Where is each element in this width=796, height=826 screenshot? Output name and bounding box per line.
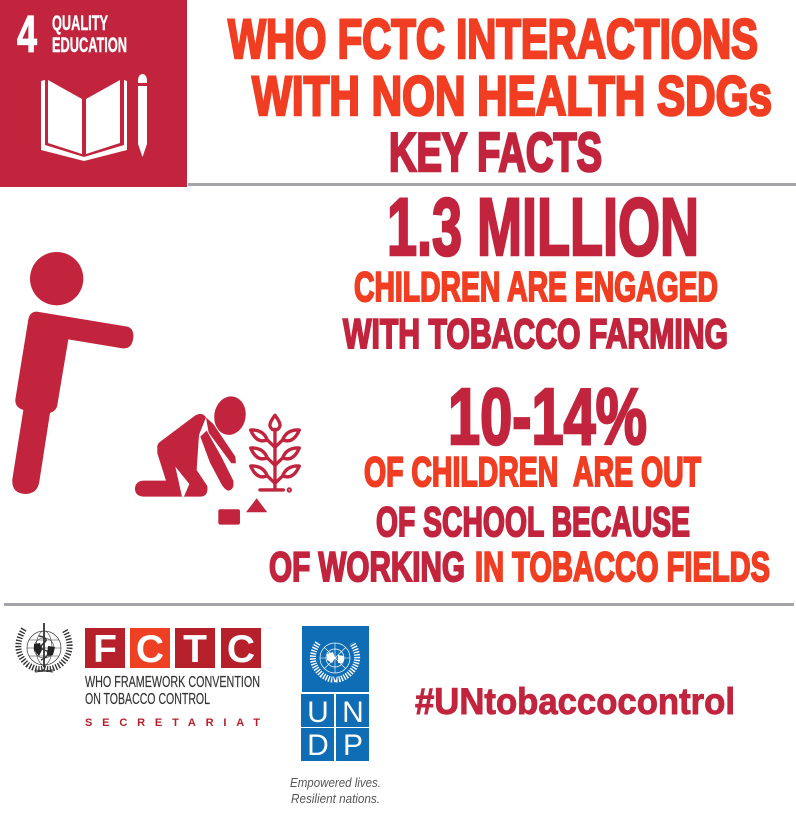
logo: WHO emblem: [18, 623, 70, 672]
badge number 4: 4: [17, 6, 37, 64]
UN emblem: [313, 643, 357, 680]
title: KEY FACTS: [389, 121, 602, 183]
footer divider: [4, 603, 794, 606]
statistic: 10-14% of children: OF WORKING: [269, 543, 465, 590]
secretariat label: SECRETARIAT: [85, 717, 260, 729]
UNDP letters: D: [307, 729, 329, 762]
logo: UNDP: [290, 626, 381, 806]
FCTC wordmark: ON TOBACCO CONTROL: [85, 691, 210, 708]
icon: pencil: [138, 74, 147, 157]
hashtag: #UNtobaccocontrol: [415, 681, 735, 722]
UNDP letters: N: [342, 696, 364, 729]
statistic: 10-14% of children: [269, 372, 770, 590]
icon: child crouching: [135, 394, 249, 497]
FCTC letters: C: [227, 628, 255, 671]
icon: open book: [41, 80, 127, 161]
UNDP tagline: Empowered lives.: [290, 775, 381, 790]
badge label: [52, 12, 127, 57]
panel: SDG 4 quality education badge: [0, 0, 187, 187]
badge label: EDUCATION: [52, 34, 127, 57]
icon: toy blocks: [218, 498, 267, 525]
icon: tobacco plant: [251, 415, 299, 491]
UNDP letters: U: [307, 696, 329, 729]
FCTC wordmark: WHO FRAMEWORK CONVENTION: [85, 674, 260, 691]
FCTC letters: F: [93, 628, 117, 671]
badge label: QUALITY: [52, 12, 108, 35]
UNDP letters: P: [343, 729, 363, 762]
title: [228, 7, 772, 183]
UNDP letters: [307, 696, 364, 762]
header divider: [188, 183, 796, 186]
statistic: 10-14% of children: 10-14%: [448, 372, 647, 461]
UNDP tagline: [290, 775, 381, 806]
icon: adult pointing at child: [12, 252, 133, 494]
FCTC letters: C: [136, 628, 164, 671]
logo: FCTC: [85, 628, 261, 729]
FCTC letters: T: [183, 628, 207, 671]
FCTC letters: [93, 628, 255, 671]
FCTC wordmark: [85, 674, 260, 708]
UNDP tagline: Resilient nations.: [291, 791, 380, 806]
statistic: 1.3 million children: [343, 182, 728, 357]
